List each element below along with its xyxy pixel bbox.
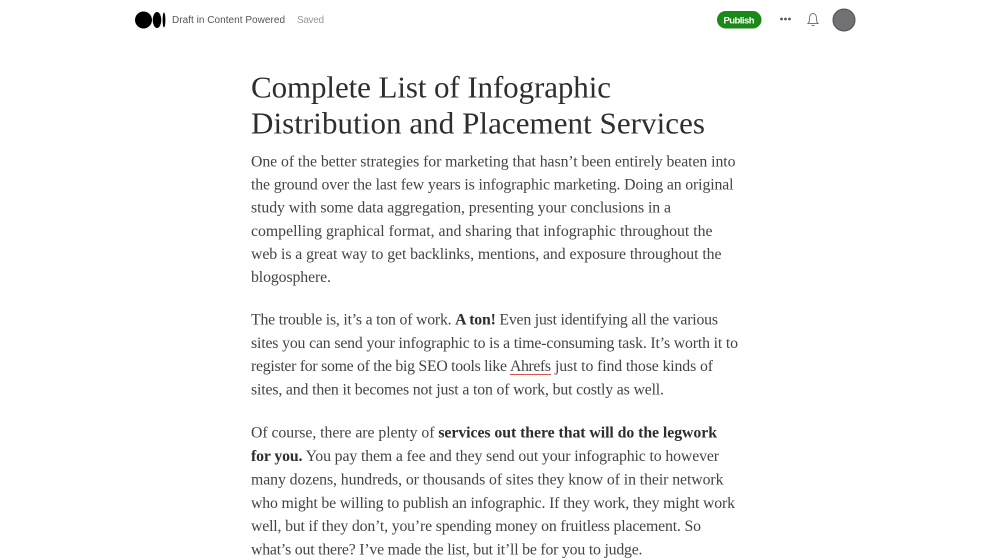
saved status: Saved <box>297 15 324 26</box>
paragraph 3: who might be willing to publish an infographic. If they work, they might work <box>251 495 735 512</box>
icon: logo <box>135 12 165 28</box>
title <box>251 70 705 140</box>
icon: more menu <box>780 18 791 20</box>
paragraph 3: many dozens, hundreds, or thousands of sites they know of in their network <box>251 472 724 488</box>
link underline <box>510 374 551 376</box>
paragraph 2 <box>251 312 738 398</box>
paragraph 2: sites, and then it becomes not just a ton of work, but costly as well. <box>251 382 664 398</box>
user avatar <box>833 9 855 31</box>
paragraph 3: well, but if they don’t, you’re spending money on fruitless placement. So <box>251 518 701 535</box>
paragraph 3: what’s out there? I’ve made the list, but it’ll be for you to judge. <box>251 541 642 558</box>
title: Complete List of Infographic <box>251 70 611 104</box>
paragraph 1 <box>251 154 736 286</box>
draft label: Draft in Content Powered <box>172 15 285 26</box>
paragraph 1: compelling graphical format, and sharing that infographic throughout the <box>251 223 712 240</box>
paragraph 3: for you. You pay them a fee and they send out your infographic to however <box>251 448 720 465</box>
paragraph 2: sites you can send your infographic to is a time-consuming task. It’s worth it to <box>251 335 738 352</box>
paragraph 1: study with some data aggregation, presenting your conclusions in a <box>251 200 671 217</box>
paragraph 3 <box>251 424 735 558</box>
top navigation bar <box>135 9 855 31</box>
paragraph 2: The trouble is, it’s a ton of work. A ton! Even just identifying all the various <box>251 312 718 328</box>
paragraph 2: just to find those kinds of <box>554 358 714 375</box>
paragraph 3: Of course, there are plenty of services out there that will do the legwork <box>251 424 717 441</box>
icon: notification bell <box>808 14 818 26</box>
title: Distribution and Placement Services <box>251 106 705 140</box>
publish button: Publish <box>724 15 755 26</box>
link: Ahrefs: Ahrefs <box>510 358 551 375</box>
paragraph 1: blogosphere. <box>251 269 331 286</box>
publish button <box>717 11 762 28</box>
paragraph 2: register for some of the big SEO tools like <box>251 358 507 375</box>
paragraph 1: web is a great way to get backlinks, mentions, and exposure throughout the <box>251 246 722 263</box>
paragraph 1: One of the better strategies for marketing that hasn’t been entirely beaten into <box>251 154 736 170</box>
paragraph 1: the ground over the last few years is infographic marketing. Doing an original <box>251 176 734 194</box>
